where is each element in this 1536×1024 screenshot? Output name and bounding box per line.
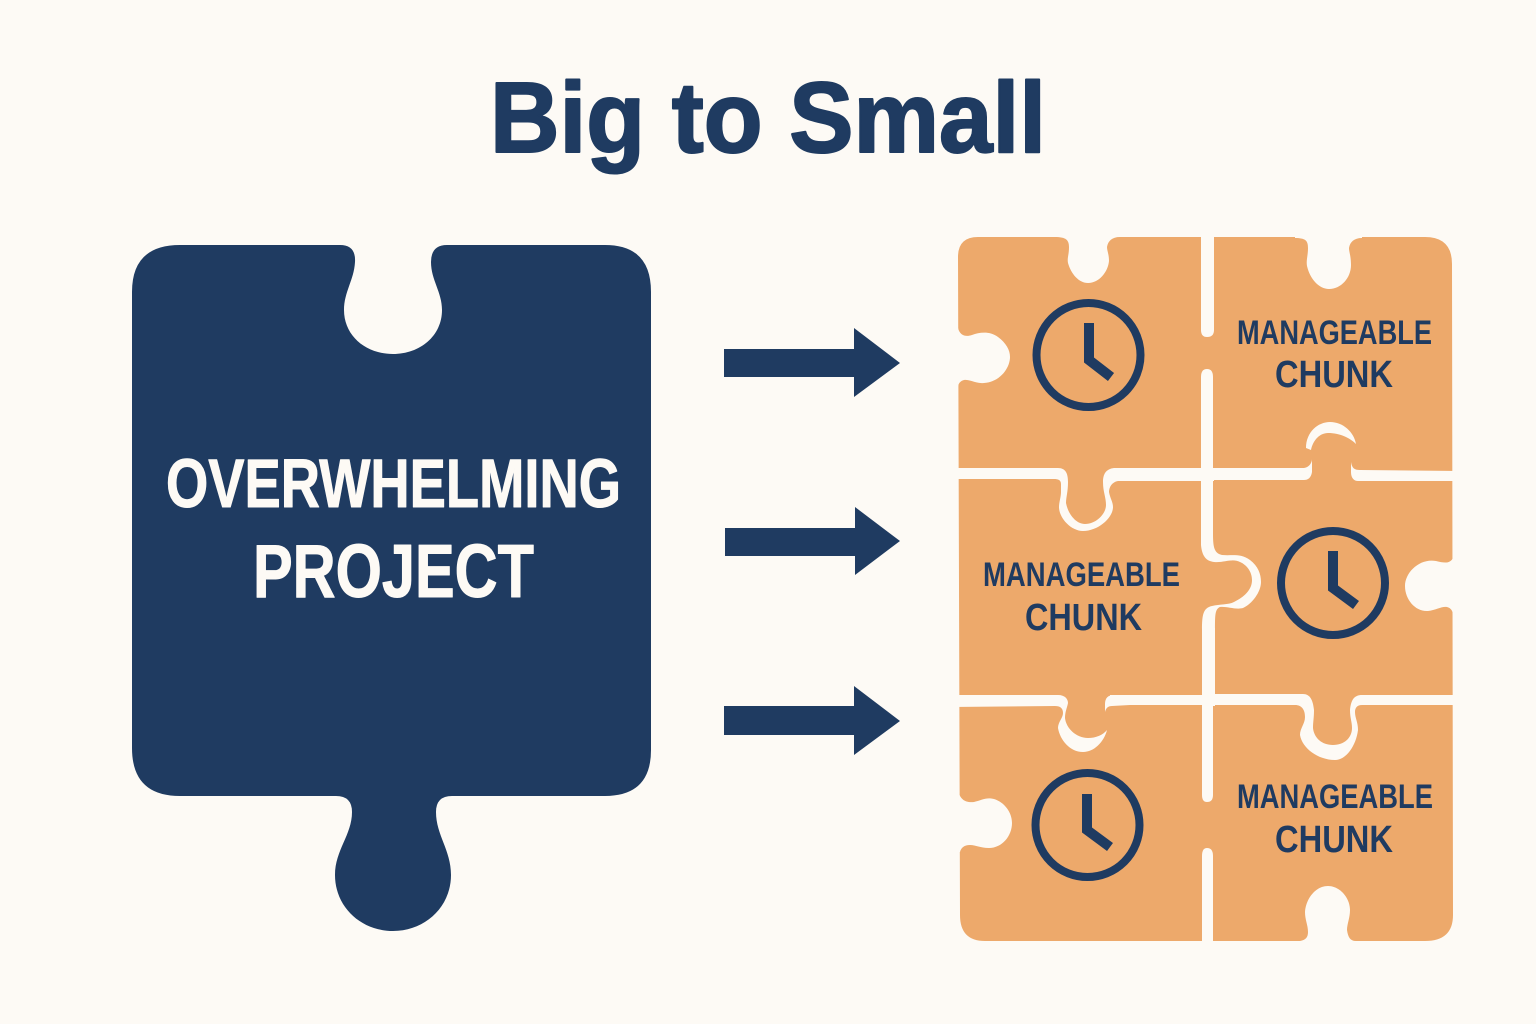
chunk label: row two left xyxy=(983,556,1180,639)
chunk label: row two left: MANAGEABLE xyxy=(983,556,1180,594)
gap: curve around middle tab xyxy=(1201,530,1261,630)
gap: row one left around tab xyxy=(950,468,1130,531)
chunk label: row three right: CHUNK xyxy=(1275,819,1393,861)
clock icon: row one left xyxy=(1036,303,1140,407)
notch: top left xyxy=(1055,230,1120,283)
project label xyxy=(166,445,621,613)
arrow: middle xyxy=(725,507,900,575)
arrow: bottom xyxy=(724,686,900,755)
chunk label: row one right: CHUNK xyxy=(1275,354,1393,396)
panel: overwhelming project puzzle piece xyxy=(132,245,651,931)
title: Big to Small xyxy=(490,62,1046,174)
gap: row two right around tab xyxy=(1210,694,1460,760)
gap: row two left around tab xyxy=(950,695,1107,752)
notch: left row three xyxy=(950,788,1012,852)
notch: right row two xyxy=(1405,555,1460,616)
gap: row one right right of tab xyxy=(1351,462,1460,481)
gap: row two left right of tab xyxy=(1105,695,1130,712)
notch: top right xyxy=(1295,230,1362,289)
project label: PROJECT xyxy=(253,529,534,613)
large navy puzzle piece xyxy=(132,245,651,931)
clock icon: row two right xyxy=(1281,531,1385,635)
arrow: top xyxy=(724,328,900,397)
chunk label: row one right: MANAGEABLE xyxy=(1237,314,1432,352)
puzzle gaps and notches xyxy=(950,230,1460,950)
orange puzzle base xyxy=(958,237,1453,941)
notch: left row one xyxy=(950,325,1010,388)
project label: OVERWHELMING xyxy=(166,445,621,522)
chunk label: row two left: CHUNK xyxy=(1025,597,1142,639)
chunk label: row three right: MANAGEABLE xyxy=(1237,778,1433,816)
clock icon: row three left xyxy=(1036,773,1140,877)
gap: row one right left of tab xyxy=(1210,459,1312,480)
chunk label: row three right xyxy=(1237,778,1433,861)
panel: manageable chunks puzzle xyxy=(950,230,1460,950)
crescent above row two tab xyxy=(1306,422,1356,450)
chunk label: row one right xyxy=(1237,314,1432,396)
notch: bottom right xyxy=(1300,886,1356,950)
